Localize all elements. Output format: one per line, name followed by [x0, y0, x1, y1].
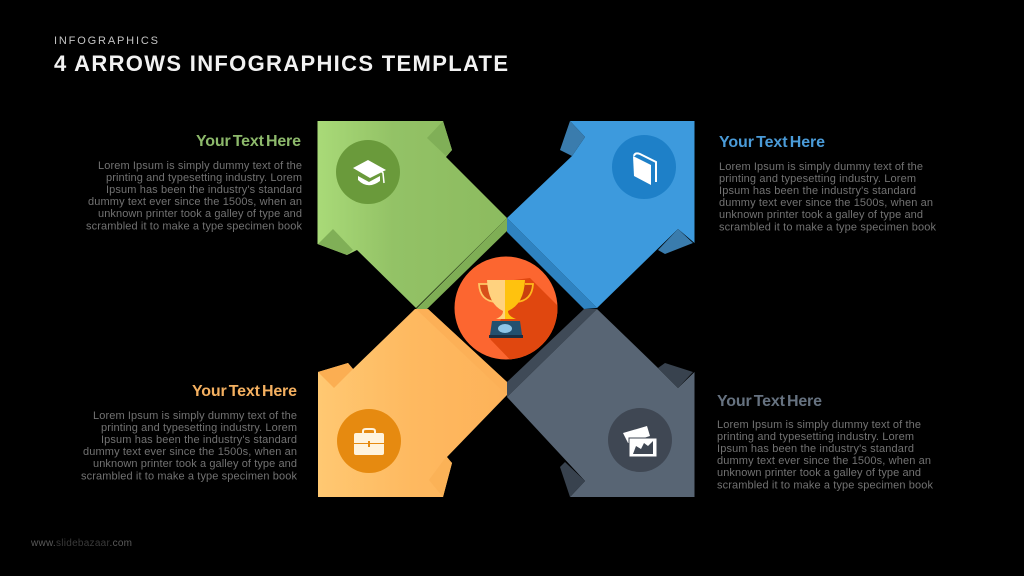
blue arrow fold top: [560, 121, 585, 156]
footer url: www.slidebazaar.com: [30, 538, 132, 549]
blue body text: unknown printer took a galley of type and: [719, 209, 923, 221]
blue heading: Your Text Here: [719, 134, 825, 151]
grey body text: dummy text ever since the 1500s, when an: [717, 455, 931, 467]
blue body text: scrambled it to make a type specimen book: [719, 222, 936, 234]
text block: green: [86, 133, 302, 232]
green body text: unknown printer took a galley of type and: [98, 208, 302, 220]
icon: graduation cap: [336, 140, 400, 204]
panel: grey arrow: [507, 309, 694, 497]
green body text: scrambled it to make a type specimen book: [86, 220, 302, 232]
green body text: [86, 160, 302, 232]
orange body text: printing and typesetting industry. Lorem: [101, 422, 297, 434]
grey arrow fold top: [658, 363, 693, 388]
orange arrow body: [318, 309, 507, 497]
green arrow fold top: [427, 121, 452, 156]
text block: orange: [81, 383, 298, 482]
title: 4 ARROWS INFOGRAPHICS TEMPLATE: [54, 51, 508, 76]
grey arrow fold bottom: [560, 462, 585, 497]
grey heading: Your Text Here: [717, 393, 822, 410]
icon: photos: [608, 408, 672, 472]
grey body text: [717, 419, 934, 492]
green body text: Lorem Ipsum is simply dummy text of the: [98, 160, 302, 172]
panel: blue arrow: [507, 121, 694, 309]
orange heading: Your Text Here: [192, 383, 297, 400]
orange body text: Lorem Ipsum is simply dummy text of the: [93, 410, 297, 422]
grey arrow body: [507, 309, 694, 497]
orange body text: dummy text ever since the 1500s, when an: [83, 446, 297, 458]
green arrow side strip: [416, 218, 507, 309]
blue body text: Lorem Ipsum is simply dummy text of the: [719, 161, 923, 173]
green body text: dummy text ever since the 1500s, when an: [88, 196, 302, 208]
grey arrow side strip: [507, 309, 597, 397]
orange body text: unknown printer took a galley of type and: [93, 458, 297, 470]
panel: orange arrow: [318, 309, 507, 497]
orange arrow fold top: [318, 363, 353, 388]
blue body text: Ipsum has been the industry's standard: [719, 185, 916, 197]
panel: green arrow: [318, 121, 507, 309]
blue arrow side strip: [507, 218, 597, 309]
green arrow fold bottom: [318, 229, 353, 255]
icon: book: [612, 135, 676, 199]
blue body text: printing and typesetting industry. Lorem: [719, 173, 916, 185]
orange arrow fold bottom: [429, 457, 452, 497]
eyebrow label: INFOGRAPHICS: [54, 35, 158, 47]
text block: blue: [719, 134, 936, 234]
green body text: printing and typesetting industry. Lorem: [106, 172, 302, 184]
green arrow body: [318, 121, 507, 308]
blue body text: dummy text ever since the 1500s, when an: [719, 197, 933, 209]
orange body text: scrambled it to make a type specimen book: [81, 470, 298, 482]
blue arrow fold bottom: [658, 229, 693, 254]
icon: trophy: [479, 280, 533, 338]
blue body text: [719, 161, 936, 234]
green body text: Ipsum has been the industry's standard: [106, 184, 302, 196]
blue arrow body: [507, 121, 694, 308]
grey body text: printing and typesetting industry. Lorem: [717, 431, 914, 443]
center circle with trophy: [454, 256, 558, 360]
grey body text: unknown printer took a galley of type and: [717, 467, 921, 479]
orange arrow side strip: [416, 309, 507, 395]
green heading: Your Text Here: [196, 133, 301, 150]
grey body text: scrambled it to make a type specimen book: [717, 480, 934, 492]
text block: grey: [717, 393, 934, 492]
grey body text: Lorem Ipsum is simply dummy text of the: [717, 419, 921, 431]
icon: briefcase: [337, 409, 401, 473]
orange body text: [81, 410, 298, 482]
orange body text: Ipsum has been the industry's standard: [101, 434, 297, 446]
grey body text: Ipsum has been the industry's standard: [717, 443, 914, 455]
trophy long shadow: [490, 278, 558, 360]
